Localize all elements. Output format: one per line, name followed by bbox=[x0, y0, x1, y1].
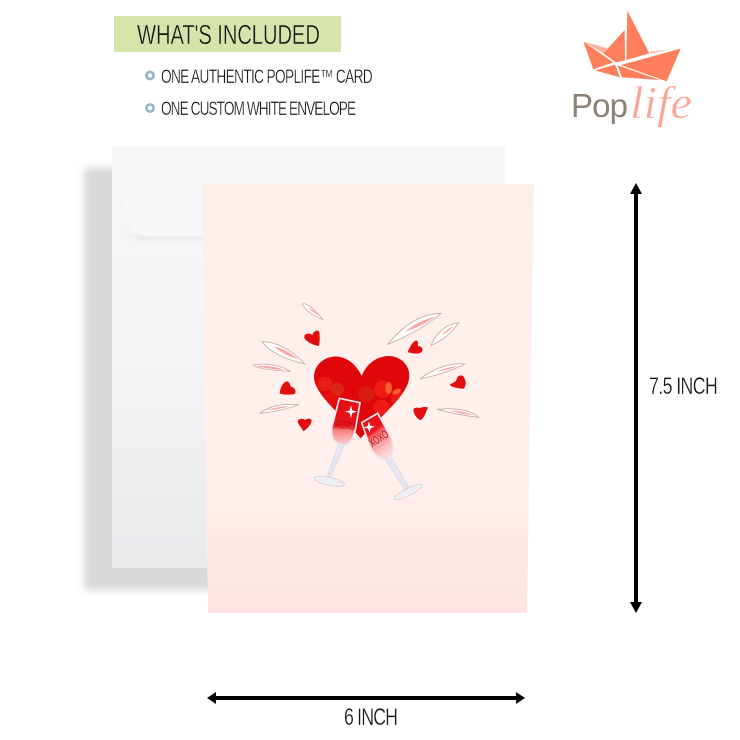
champagne glass left: XOXO bbox=[335, 418, 356, 433]
logo: poplife: life bbox=[630, 77, 692, 128]
arrow: card height bbox=[630, 183, 642, 613]
champagne glass right bbox=[362, 413, 424, 502]
label: 6 inch: 6 INCH bbox=[344, 705, 398, 731]
included items list: ONE CUSTOM WHITE ENVELOPE bbox=[161, 98, 356, 120]
small hearts bbox=[280, 331, 466, 431]
pop-up card bbox=[201, 184, 534, 613]
included items list: ONE AUTHENTIC POPLIFE™ CARD bbox=[161, 66, 373, 88]
heading band: what's included: WHAT'S INCLUDED bbox=[137, 20, 320, 51]
burst leaves bbox=[253, 304, 479, 417]
arrow: card width bbox=[207, 692, 525, 704]
logo: poplife: Pop bbox=[571, 87, 628, 124]
logo: poplife bbox=[571, 11, 692, 128]
card illustration: heart and champagne glasses bbox=[253, 304, 479, 502]
label: 7.5 inch: 7.5 INCH bbox=[649, 374, 718, 400]
included items list bbox=[146, 66, 373, 120]
main heart bbox=[312, 353, 412, 440]
envelope with shadow bbox=[84, 146, 505, 590]
champagne glass left bbox=[313, 398, 360, 488]
champagne glass right: XOXO bbox=[367, 428, 391, 450]
heading band: what's included bbox=[114, 16, 341, 52]
